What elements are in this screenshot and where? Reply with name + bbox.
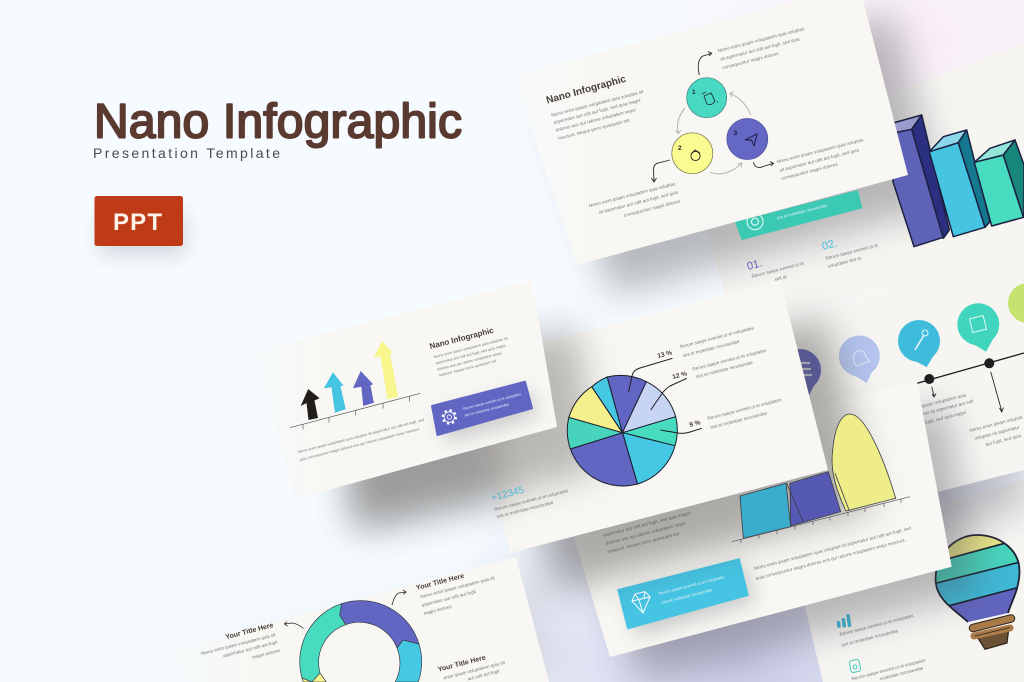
icon: purple bubble [779,349,821,397]
text: item 01: sint at [774,274,788,282]
text: left paragraph: aspernatur aut odit aut fugit, sed quia magni [603,510,691,538]
leader lines [629,358,702,433]
icon: gear [443,410,456,424]
arrows: callouts [652,52,774,182]
text: pie note one: Rerum saepe eveniet ut et voluptates [679,325,755,349]
shadow: arrows slide on background [340,395,510,530]
button: purple callout [432,382,532,435]
badge: PPT [94,196,183,246]
text: step 1 note [717,26,806,70]
text: item 02: Rerum saepe eveniet ut et [825,242,879,261]
badge: PPT: PPT [113,209,162,236]
text: bulb note two: molestiae recusandae [879,665,924,681]
button: blue callout [618,559,748,628]
text: item 01 [746,257,805,282]
text: donut right top: Nemo enim ipsam voluptatem quia sit [420,575,496,599]
text: arrows paragraph: nesciunt. Neque porro quisquam est [438,359,497,378]
circle: step 1: 1 [692,89,696,96]
shadow: blue button [626,566,755,636]
text: donut right bottom [437,655,506,681]
panel: bulb slide [790,480,1024,682]
panel: donut slide [170,557,549,682]
axis [290,393,420,430]
shadow: timeline slide [760,295,1024,560]
shadow: PPT badge [100,214,185,254]
shadow: purple button [440,390,538,443]
text: donut right bottom: Your Title Here [437,655,487,674]
text: number stat: sint et molestiae recusandae [496,500,554,519]
text: number stat [490,485,569,519]
text: chart note: Nemo enim ipsam voluptatem quia voluptas sit aspernatur aut odit aut fugit, sed [753,525,912,571]
text: cycle paragraph: aspernatur aut odit aut fugit, sed quia magni [553,98,641,125]
icon: cyan arrow [324,372,346,413]
chart: bar shapes [740,414,896,538]
circle: step 1 [687,78,727,118]
text: donut left: Your Title Here [225,622,274,641]
panel: arrows slide [254,280,557,499]
text: item 02: voluptates sint et [827,255,862,269]
text: bulb note one: sint et molestiae recusandae [841,628,899,648]
text: left paragraph: dolores eos qui ratione voluptatem sequi [605,520,686,546]
button: purple callout: sint et molestiae recusandae [464,402,510,418]
text: step 3 note: sit aspernatur aut odit aut fugit, sed quia [779,147,860,173]
icon: bar chart [836,614,851,628]
text: arrows caption: quia consequuntur magni dolores eos qui ratione voluptatem sequi nesciunt. [299,427,421,462]
arrows: donut pointers [284,590,406,628]
icon: light blue bubble [839,336,880,383]
text: timeline note one: voluptas sit aspernatur aut odit [912,398,975,419]
text: arrows paragraph: dolores eos qui ratione voluptatem sequi [437,351,502,372]
icon: light bulb [934,534,1020,650]
chart axis [732,497,910,543]
text: step 1 note: sit aspernatur aut odit aut fugit, sed quia [720,36,800,62]
text: pie note three: sint et molestiae recusandae [710,410,768,430]
title: Nano Infographic [94,95,462,148]
panel: 3D bars slide [548,15,1024,330]
chart: pie [567,375,677,486]
circle: step 3: 3 [734,130,738,137]
text: left paragraph [603,510,691,554]
text: number stat: +12345 [490,485,526,504]
text: pie note two: sint et molestiae recusandae [695,360,754,379]
text: cycle paragraph: Nemo enim ipsam voluptatem quia voluptas sit [551,89,645,118]
text: item 02 [821,237,879,269]
button: blue callout: Rerum saepe eveniet ut et voluptates [658,574,725,596]
text: donut right bottom: aut odit aut fugit [467,668,501,681]
text: step 3 note [776,137,865,181]
text: step 1 note: consequuntur magni dolores [722,51,780,70]
icon: black arrow [301,389,320,420]
shadow: bell chart slide [585,405,980,680]
text: timeline note one: aut fugit, sed quia magni [917,410,967,427]
shadow: arrows slide [340,325,600,530]
text: donut left: magni dolores [251,648,281,660]
button: teal callout: sint et molestiae recusandae [776,202,828,220]
icon: purple arrow [353,371,374,406]
panel: cycle slide [513,0,908,265]
circle: step 2: 2 [678,145,682,152]
text: pie note three: Rerum saepe eveniet ut et voluptates [707,397,783,421]
panel: bell chart slide [555,380,952,657]
text: donut right top [416,573,496,616]
text: arrows paragraph: aspernatur aut odit aut fugit, sed quia magni [435,344,506,365]
text: donut left: Nemo enim ipsam voluptatem quia sit [201,632,277,656]
text: item 01: 01. [746,257,764,273]
text: timeline note two [969,414,1024,447]
panel: pie chart slide [340,280,828,553]
button: blue callout: sint et molestiae recusandae [661,587,713,605]
button: purple callout: Rerum saepe eveniet ut et voluptates [463,392,522,411]
text: step 2 note: sit aspernatur aut odit aut fugit, sed quia [598,190,679,215]
shadow: cycle slide [548,15,943,295]
label: 13 percent: 13 % [657,349,673,360]
text: cycle paragraph: nesciunt. Neque porro quisquam est [557,117,631,141]
heading: cycle slide: Nano Infographic [545,74,628,106]
chart: 3D bars [893,115,1024,247]
icon: yellow arrow [374,341,398,399]
text: timeline note two: Nemo enim ipsam voluptat [969,414,1024,433]
icon: cyan bubble [898,320,940,367]
text: donut left [201,622,281,660]
text: cycle paragraph: dolores eos qui ratione voluptatem sequi [555,107,636,133]
text: chart note: quia consequuntur magni dolores eos qui ratione voluptatem sequi nesciunt. [755,537,906,581]
text: arrows paragraph [433,336,508,378]
text: step 2 note [588,181,681,218]
circle: step 3 [727,118,768,160]
label: 9 percent: 9 % [689,419,702,429]
arrows: timeline pointers [932,372,1004,412]
text: bulb note one [839,613,915,648]
text: timeline note two: voluptas sit aspernatur [974,424,1020,441]
timeline [905,353,1024,387]
chart: donut [300,601,422,682]
icon: diamond [632,592,650,613]
text: donut left: aspernatur aut odit aut fugit [223,639,279,658]
text: arrows paragraph: Nemo enim ipsam voluptatem quia voluptas sit [433,336,508,359]
text: donut right bottom: enim ipsam voluptatem quia sit [443,660,506,680]
text: donut right top: magni dolores [423,604,453,616]
text: item 02: 02. [821,237,839,253]
text: arrows caption: Nemo enim ipsam voluptatem quia voluptas sit aspernatur aut odit aut fugit, sed [297,418,424,454]
panel: timeline slide [745,252,1024,527]
text: timeline note one [910,392,975,427]
icon: teal bubble [957,303,999,352]
arrows: cycle [676,92,751,174]
text: step 3 note: Nemo enim ipsam voluptatem quia voluptas [776,137,865,164]
icon: rounded square [849,659,861,673]
text: donut right top: aspernatur aut odit aut fugit [421,589,477,608]
icon: green bubble [1008,283,1024,323]
text: donut right top: Your Title Here [416,573,465,592]
text: pie note two: Rerum saepe eveniet ut et voluptates [692,348,768,372]
text: cycle paragraph [551,89,645,141]
text: step 1 note: Nemo enim ipsam voluptatem quia voluptas [717,26,806,53]
text: bulb note two: Rerum saepe eveniet ut et voluptates [851,657,927,681]
subtitle: Presentation Template [93,145,280,161]
text: left paragraph: nesciunt. Neque porro quisquam est [607,531,680,554]
text: number stat: Rerum saepe eveniet ut et voluptates [494,488,569,512]
text: item 01: Rerum saepe eveniet ut et [751,260,805,279]
button: teal callout [735,190,862,240]
shadow: pie slide [507,318,873,591]
shadow: donut slide [230,572,560,680]
text: timeline note one: enim ipsam voluptatem quia [910,392,967,411]
heading: arrows slide: Nano Infographic [429,326,495,351]
text: step 2 note: consequuntur magni dolores [623,198,681,218]
text: bulb note one: Rerum saepe eveniet ut et voluptates [839,613,915,637]
text: step 3 note: consequuntur magni dolores [781,161,839,181]
circle: step 2 [672,133,713,174]
text: timeline note two: aut fugit, sed quia [985,433,1022,447]
text: pie note one: sint et molestiae recusandae [682,339,740,358]
label: 12 percent: 12 % [672,370,688,381]
text: step 2 note: Nemo enim ipsam voluptatem quia voluptas [588,181,677,208]
